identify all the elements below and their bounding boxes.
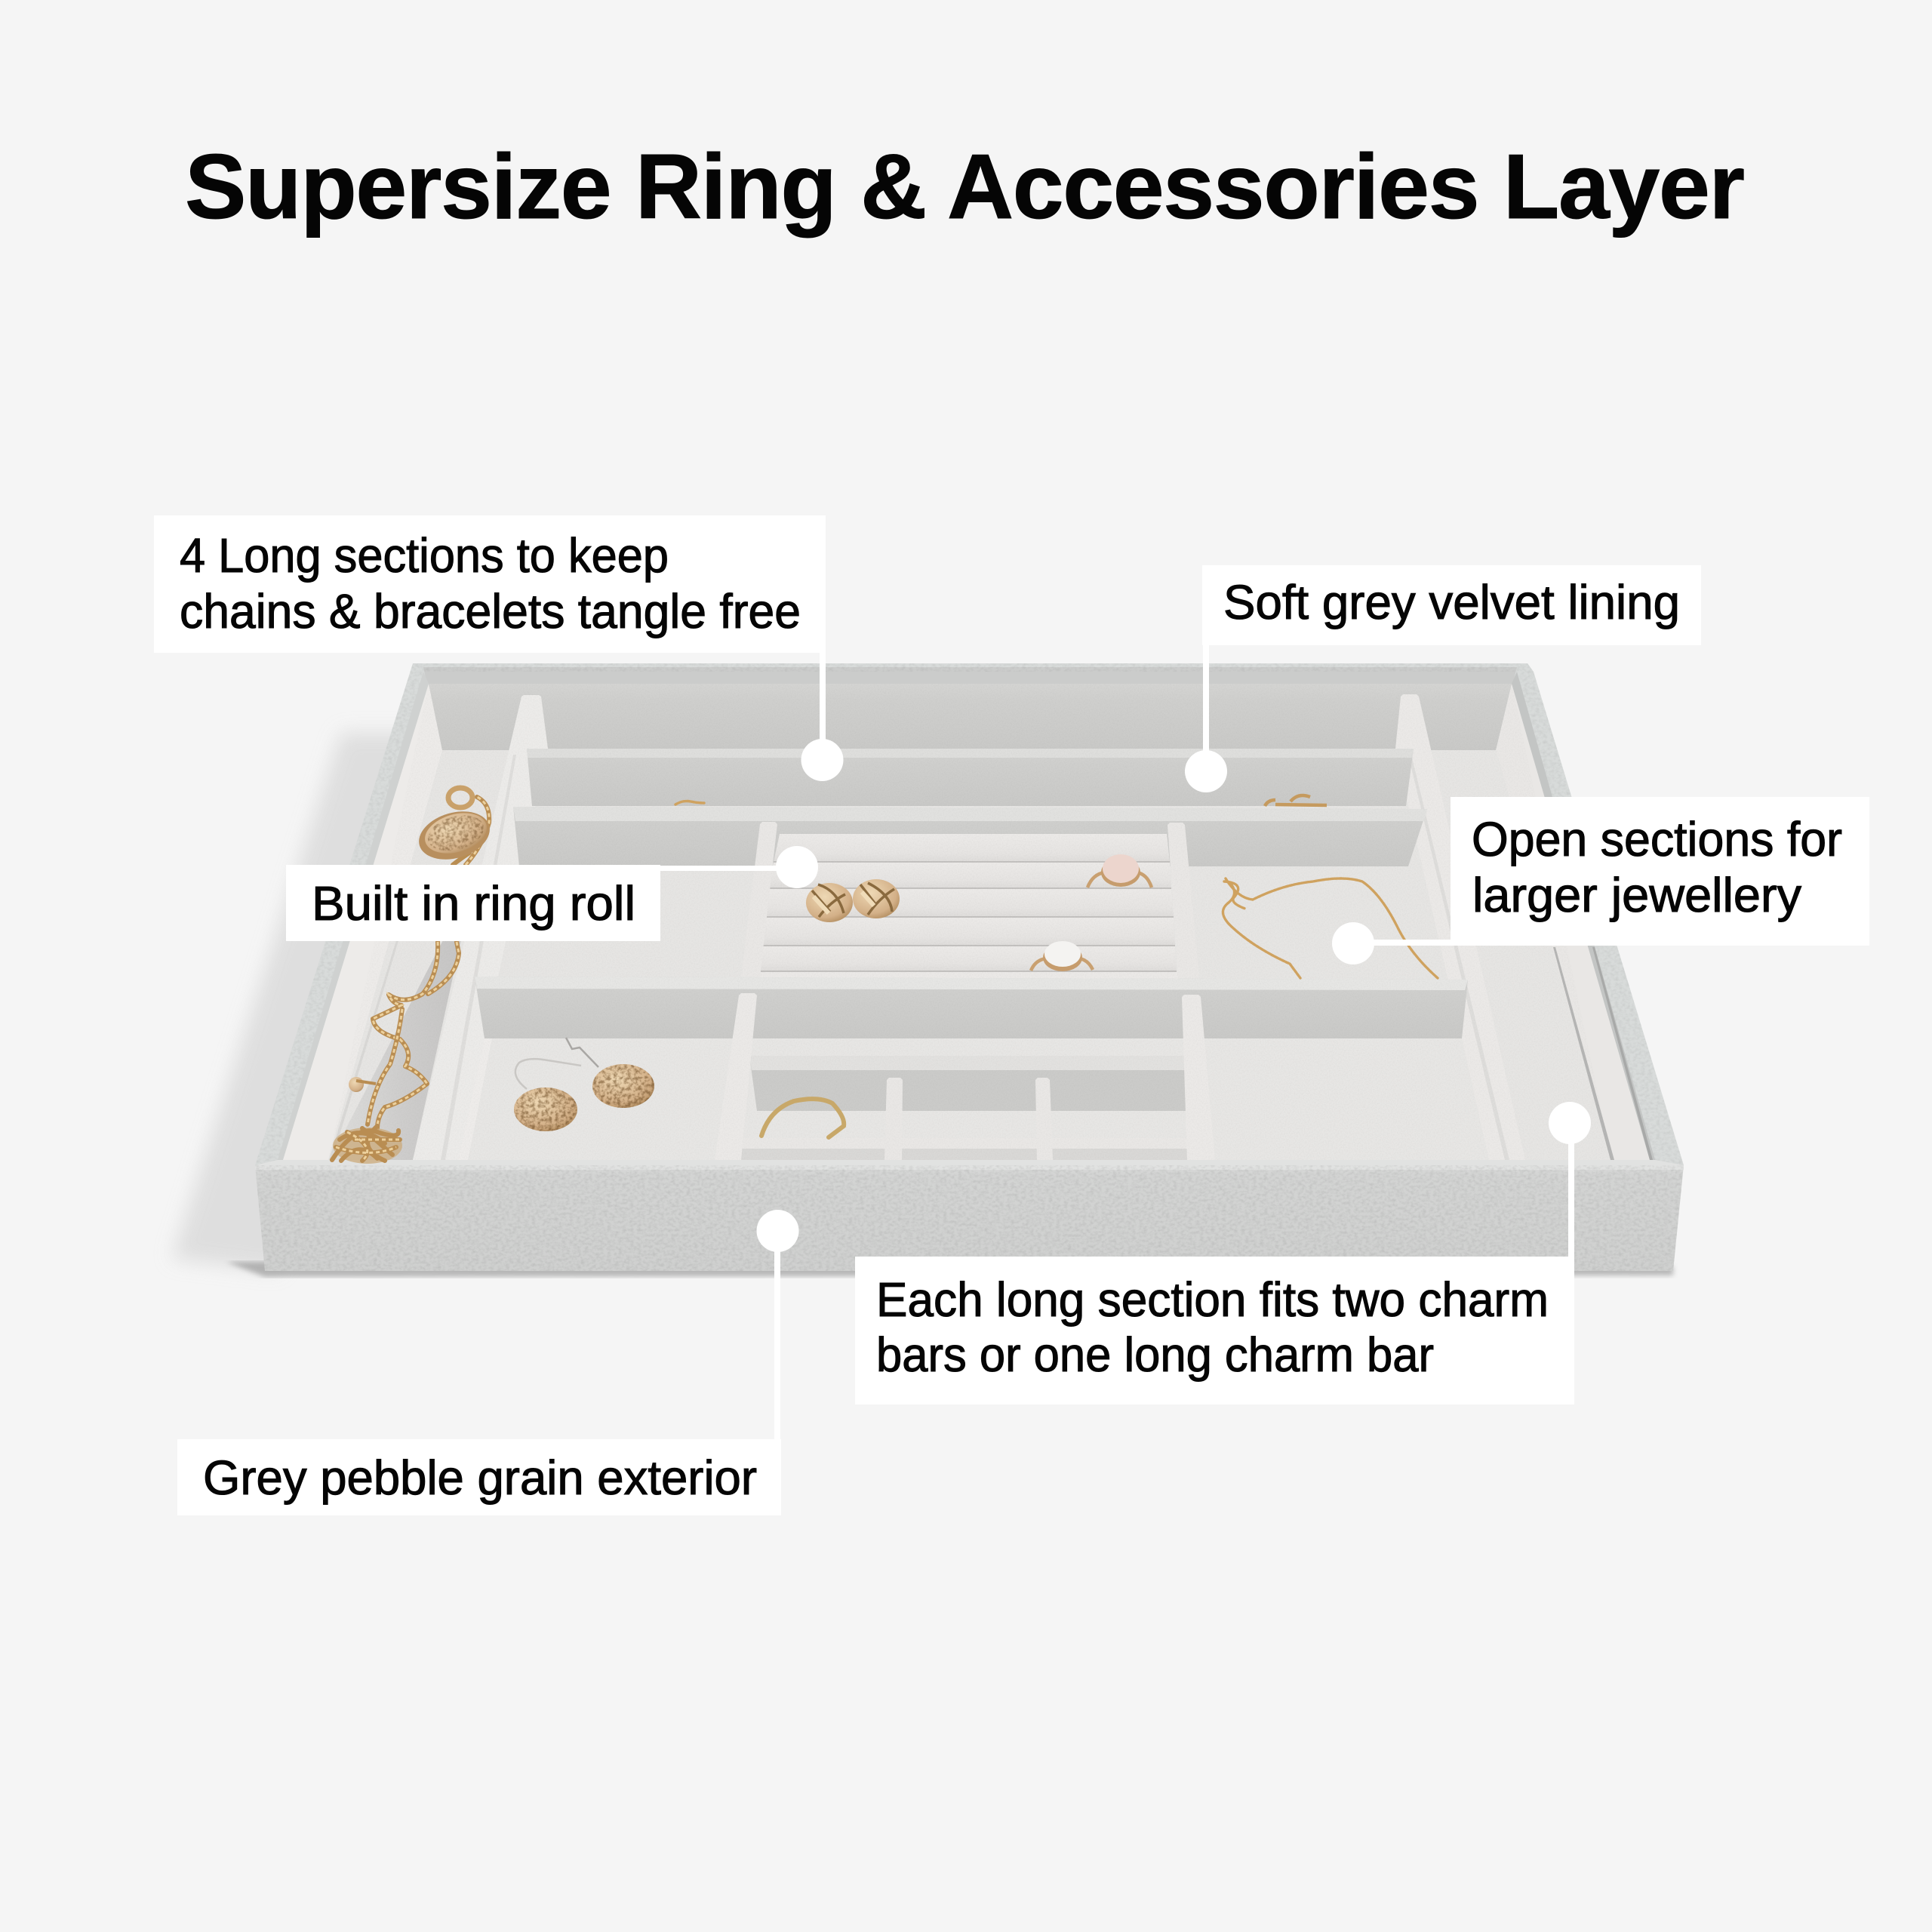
connector and dot (657, 846, 818, 888)
jewellery: fine necklace (1223, 878, 1438, 978)
label text: Open sections for (1472, 812, 1842, 866)
jewellery: rose quartz ring (1088, 854, 1152, 888)
callout: velvet lining (1185, 565, 1701, 792)
long section divider one (527, 749, 1414, 806)
small compartment front bar (740, 1138, 1194, 1160)
connector and dot (1549, 1102, 1591, 1263)
tray drop shadow (172, 733, 1673, 1277)
front velvet divider (475, 977, 1468, 1038)
callout: charm bars (855, 1102, 1591, 1404)
left long divider (413, 695, 548, 1160)
jewellery: knot earrings (806, 879, 900, 922)
label text (180, 528, 801, 638)
label text (876, 1272, 1549, 1382)
jewellery: coin pendant (414, 788, 495, 867)
jewellery tray (172, 663, 1684, 1277)
connector and dot (756, 1210, 798, 1442)
back velvet wall (429, 684, 1512, 750)
ring roll (759, 834, 1180, 980)
label box (1451, 797, 1869, 946)
jewellery: clasp in long section (675, 795, 1327, 806)
left lane wall (283, 684, 442, 1160)
label text: larger jewellery (1472, 868, 1801, 922)
callout: ring roll (286, 846, 818, 941)
velvet floor (328, 750, 1612, 1160)
label text (1472, 812, 1842, 922)
front pebble face (255, 1160, 1684, 1271)
jewellery: white stone ring (1031, 941, 1093, 971)
long section divider two (513, 807, 1427, 866)
connector and dot (801, 649, 844, 781)
ring roll side dividers (741, 822, 1199, 978)
label text: Soft grey velvet lining (1223, 575, 1680, 629)
outer pebble rim (255, 663, 1684, 1165)
callout: pebble exterior (177, 1210, 798, 1515)
label box (286, 865, 660, 941)
jewellery: long chain (332, 942, 459, 1164)
earring compartment inner edge (458, 1038, 492, 1160)
jewellery: disc earrings (514, 1038, 654, 1131)
velvet grain (328, 684, 1612, 1160)
rim pebble texture (255, 663, 1684, 1165)
jewellery: gold ring (761, 1099, 844, 1137)
lower vertical dividers (715, 993, 1215, 1160)
small compartment wall (749, 1056, 1186, 1111)
label box (154, 515, 826, 653)
label text: bars or one long charm bar (876, 1327, 1434, 1382)
label box (1202, 565, 1701, 645)
label box (855, 1257, 1574, 1404)
label text: Each long section fits two charm (876, 1272, 1549, 1327)
lower floor compartments (458, 1038, 1489, 1160)
connector and dot (1185, 641, 1227, 792)
left lane dark floor patch (330, 936, 462, 1160)
label text: 4 Long sections to keep (180, 528, 669, 583)
inner tray side shadow lines (278, 672, 429, 1160)
label text: chains & bracelets tangle free (180, 584, 801, 638)
connector and dot (1332, 922, 1455, 964)
right lane wall (1496, 684, 1650, 1160)
back rim pebble band (423, 667, 1517, 685)
label box (177, 1439, 781, 1515)
label text: Grey pebble grain exterior (203, 1451, 757, 1505)
label text: Built in ring roll (312, 876, 635, 931)
callout: open sections (1332, 797, 1869, 964)
title: Supersize Ring & Accessories Layer (185, 135, 1745, 238)
right long divider (1395, 694, 1525, 1160)
callout: long sections (154, 515, 844, 781)
